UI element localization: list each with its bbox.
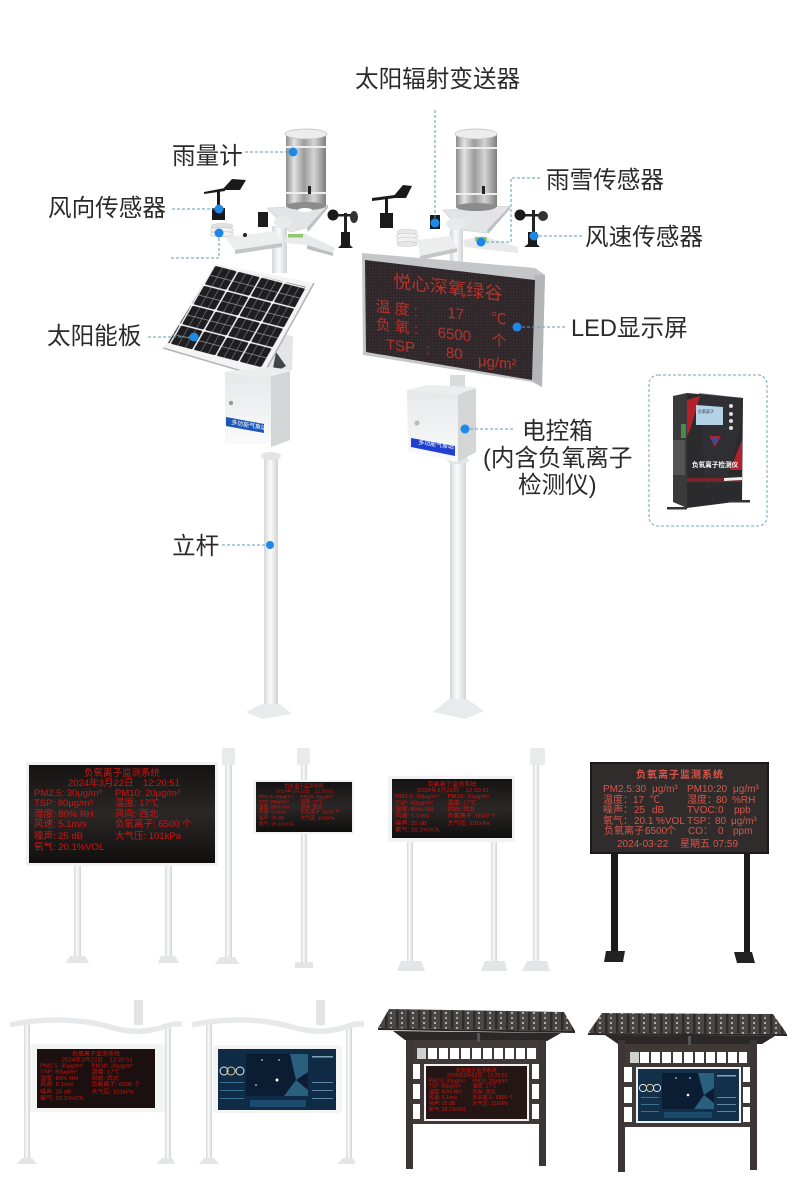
product: pavilion LED display: 噪声: 25 dB — [429, 1100, 456, 1107]
product: pavilion LED display: 风速: 5.1m/s — [429, 1095, 458, 1101]
product: sensor pole 1 — [215, 748, 239, 964]
LED screen: main — [362, 253, 545, 387]
product: black frame LED display: 30 — [635, 784, 647, 795]
product: black frame LED display: 07:59 — [713, 839, 738, 850]
control box: right: 多功能气象站 — [418, 438, 455, 451]
product: white dual-leg LED display: 风速: 5.1m/s — [34, 819, 87, 830]
marker dots — [190, 148, 538, 549]
product: single-pole LED display: 大气压: 101kPa — [300, 815, 335, 822]
small black sensor: left — [258, 212, 268, 227]
labels: 检测仪) — [518, 472, 597, 499]
control box: left: 多功能气象站 — [231, 418, 268, 432]
anemometer: left — [328, 210, 358, 248]
product: third dual-leg LED display: 湿度: 80% RH — [395, 805, 434, 813]
product: arched LED display: 负氧离子: 6500 个 — [92, 1080, 140, 1088]
LED screen: main: 个 — [492, 332, 507, 351]
product: black frame LED display: μg/m³ — [652, 784, 678, 795]
station: solar-powered left unit — [163, 129, 358, 719]
product: pavilion LED display: 负氧离子: 6500 个 — [472, 1094, 514, 1101]
labels: LED显示屏 — [571, 316, 688, 342]
LED screen: main: ℃ — [491, 310, 507, 329]
solar panel — [163, 264, 314, 377]
product: black frame LED display: %VOL — [656, 816, 685, 827]
product: white dual-leg LED display — [26, 762, 218, 963]
labels: 风速传感器 — [585, 224, 703, 251]
product: black frame LED display: 湿度： — [687, 793, 717, 806]
product: black frame LED display: PM10: — [687, 784, 716, 795]
product: black frame LED display: ppm — [733, 826, 752, 837]
product: pavilion LED display: 氧气: 20.1%VOL — [429, 1106, 467, 1113]
product: black frame LED display: ppb — [734, 805, 751, 816]
product: white dual-leg LED display: 氧气: 20.1%VOL — [34, 841, 104, 853]
product: arched LED display: 负氧离子监测系统 — [72, 1050, 120, 1058]
product: black frame LED display — [590, 762, 769, 963]
callout: detector device: 负氧离子 — [698, 408, 714, 414]
LED screen: main: 6500 — [438, 325, 471, 345]
product: pavilion LED display: 2024年3月22日 12:20:51 — [447, 1072, 508, 1079]
callout: detector device — [649, 375, 767, 526]
product: third dual-leg LED display: 大气压: 101kPa — [447, 819, 491, 827]
product: third dual-leg LED display: 2024年3月22日 12:20:51 — [417, 786, 490, 794]
product: pavilion LED display: PM10: 20μg/m³ — [472, 1078, 508, 1084]
rain gauge: right — [443, 129, 510, 234]
product: black frame LED display: 80 — [715, 816, 727, 827]
product: white dual-leg LED display: 温度: 17℃ — [115, 797, 160, 809]
product: third dual-leg LED display: 噪声: 25 dB — [395, 819, 427, 827]
product: third dual-leg LED display: 负氧离子监测系统 — [428, 780, 476, 788]
product: single-pole LED display: PM10: 20μg/m³ — [300, 794, 334, 800]
leader lines — [148, 110, 582, 545]
LED screen: main: 80 — [446, 344, 463, 363]
product: black frame LED display: ℃ — [650, 795, 660, 806]
product: black frame LED display: CO： — [688, 826, 713, 837]
product: single-pole LED display: 温度: 17℃ — [300, 798, 323, 805]
product: third dual-leg LED display — [388, 776, 515, 971]
LED screen: main: 17 — [447, 305, 464, 324]
product: arched LED display: 氧气: 20.1%VOL — [40, 1094, 85, 1102]
crossarm: left — [225, 216, 335, 273]
product: black frame LED display: 20.1 — [634, 816, 654, 827]
product: third dual-leg LED display: TSP: 80μg/m³ — [395, 800, 433, 806]
radiation sensor — [430, 215, 440, 229]
LED screen: main: : — [426, 341, 430, 359]
labels: 风向传感器 — [48, 195, 166, 222]
product: white dual-leg LED display: 2024年3月22日 12:20:51 — [68, 777, 180, 789]
anemometer: right — [514, 210, 548, 247]
product: arched LED display: 2024年3月22日 12:20:51 — [62, 1056, 133, 1064]
product: third dual-leg LED display: 温度: 17℃ — [447, 799, 476, 806]
product: arched LED display: 湿度: 80% RH — [40, 1074, 78, 1082]
bracket — [264, 333, 293, 376]
product: single-pole LED display — [253, 748, 354, 968]
product: pavilion LED display: 温度: 17℃ — [472, 1083, 496, 1090]
product: third dual-leg LED display: PM2.5: 30μg/m³ — [395, 794, 439, 800]
product: black frame LED display: %RH — [732, 795, 755, 806]
product: black frame LED display: 星期五 — [680, 838, 710, 850]
product: white dual-leg LED display: PM2.5: 30μg/m³ — [34, 788, 102, 799]
product: pavilion LED display: 大气压: 101kPa — [472, 1100, 508, 1107]
product: white dual-leg LED display: 负氧离子: 6500 个 — [115, 818, 192, 830]
product: single-pole LED display: 噪声: 25 dB — [259, 815, 284, 822]
labels: 太阳辐射变送器 — [355, 66, 520, 93]
wind vane: right — [372, 185, 412, 228]
product: single-pole LED display: 负氧离子监测系统 — [284, 783, 324, 790]
callout: detector device: 负氧离子检测仪 — [692, 460, 739, 469]
product: single-pole LED display: 湿度: 80% RH — [259, 804, 290, 811]
control box: right — [406, 385, 476, 462]
product: white dual-leg LED display: 噪声: 25 dB — [34, 830, 83, 842]
product: white dual-leg LED display: 湿度: 80% RH — [34, 808, 94, 820]
product: white dual-leg LED display: TSP: 80μg/m³ — [34, 798, 93, 809]
labels: 雨量计 — [172, 143, 243, 170]
product: pavilion LED display: TSP: 80μg/m³ — [429, 1084, 461, 1090]
product: white dual-leg LED display: 大气压: 101kPa — [115, 830, 182, 842]
product: black frame LED display: 负氧离子监测系统 — [636, 768, 724, 781]
temperature shield: right — [396, 229, 418, 246]
product: third dual-leg LED display: PM10: 20μg/m³ — [447, 794, 489, 800]
product: black frame LED display: 20 — [716, 784, 728, 795]
control box: left — [222, 367, 291, 447]
product: black frame LED display: 2024-03-22 — [617, 839, 669, 850]
LED screen: main: 负 氧 : — [376, 316, 418, 338]
product: black frame LED display: 噪声： — [603, 803, 633, 816]
product: single-pole LED display: 氧气: 20.1%VOL — [259, 820, 295, 827]
product: single-pole LED display: TSP: 80μg/m³ — [259, 799, 289, 805]
labels: 电控箱 — [522, 418, 593, 445]
labels: 雨雪传感器 — [546, 167, 664, 194]
product: black frame LED display: μg/m³ — [731, 816, 757, 827]
product: black frame LED display: TVOC: — [687, 805, 718, 816]
product: black frame LED display: 个 — [666, 825, 676, 837]
product: pavilion LED display: 湿度: 80% RH — [429, 1089, 461, 1096]
LED screen: main: 悦心深氧绿谷 — [393, 271, 503, 304]
LED screen: main: μg/m² — [478, 352, 517, 374]
product: third dual-leg LED display: 负氧离子: 6500 个 — [447, 812, 497, 819]
product: single-pole LED display: 风向: 西北 — [300, 804, 323, 811]
product: black frame LED display: 17 — [633, 795, 645, 806]
product: arched LED display: PM2.5: 30μg/m³ — [40, 1064, 83, 1070]
product: arched LED display: 风向: 西北 — [92, 1074, 119, 1082]
product: black frame LED display: 负氧离子： — [604, 824, 654, 837]
product: black frame LED display: 0 — [718, 805, 724, 816]
product: pavilion dashboard display — [588, 1013, 787, 1172]
station: LED right unit — [362, 129, 548, 719]
LED screen: main: 温 度 : — [375, 298, 418, 320]
product: pavilion LED display — [378, 1009, 575, 1169]
LED screen: main: TSP — [386, 336, 415, 357]
labels: 太阳能板 — [47, 323, 141, 350]
labels: (内含负氧离子 — [483, 445, 632, 472]
product: black frame LED display: 80 — [716, 795, 728, 806]
product: black frame LED display: 0 — [718, 826, 724, 837]
product: third dual-leg LED display: 风向: 西北 — [447, 805, 475, 813]
labels: 立杆 — [172, 533, 219, 560]
product: white dual-leg LED display: 风向: 西北 — [115, 808, 159, 820]
product: pavilion LED display: PM2.5: 30μg/m³ — [429, 1078, 466, 1084]
crossarm: right — [417, 218, 518, 267]
product: single-pole LED display: 负氧离子: 6500 个 — [300, 809, 340, 816]
product: white dual-leg LED display: 负氧离子监测系统 — [84, 767, 160, 779]
product: pavilion LED display: 负氧离子监测系统 — [456, 1067, 497, 1074]
labels — [47, 66, 703, 560]
product: pavilion LED display: 风向: 西北 — [472, 1089, 496, 1096]
product: arched LED display: 噪声: 25 dB — [40, 1088, 71, 1095]
pole: right station — [433, 375, 484, 719]
product: arched LED display: PM10: 20μg/m³ — [92, 1064, 133, 1070]
product: white dual-leg LED display: PM10: 20μg/m³ — [115, 788, 180, 799]
product: sensor pole 2 — [522, 748, 550, 971]
product: single-pole LED display: 风速: 5.1m/s — [259, 810, 286, 816]
product: black frame LED display: 6500 — [645, 826, 668, 837]
product: black frame LED display: μg/m³ — [733, 784, 759, 795]
product: third dual-leg LED display: 风速: 5.1m/s — [395, 813, 429, 819]
product: arched LED display: TSP: 80μg/m³ — [40, 1070, 77, 1076]
product: arched dashboard display — [192, 1000, 364, 1164]
product: black frame LED display: 25 — [634, 805, 646, 816]
product: single-pole LED display: PM2.5: 30μg/m³ — [259, 794, 294, 800]
product: black frame LED display: dB — [652, 805, 665, 816]
product: black frame LED display: 温度： — [603, 793, 633, 806]
temperature shield: left — [210, 224, 234, 237]
product: arched LED display: 大气压: 101kPa — [92, 1088, 134, 1095]
pole: left station — [246, 452, 292, 719]
product: third dual-leg LED display: 氧气: 20.1%VOL — [395, 826, 441, 834]
product: arched LED display: 温度: 17℃ — [92, 1068, 120, 1076]
product: arched LED display: 风速: 5.1m/s — [40, 1081, 74, 1088]
product: arched LED display — [10, 1000, 182, 1164]
product: black frame LED display: 氧气： — [603, 814, 633, 827]
rain gauge: left — [267, 129, 328, 232]
product: single-pole LED display: 2024年3月22日 12:20:51 — [276, 788, 334, 795]
product: black frame LED display: PM2.5: — [603, 784, 635, 795]
product: black frame LED display: TSP： — [687, 816, 716, 827]
wind vane: left — [204, 179, 246, 220]
